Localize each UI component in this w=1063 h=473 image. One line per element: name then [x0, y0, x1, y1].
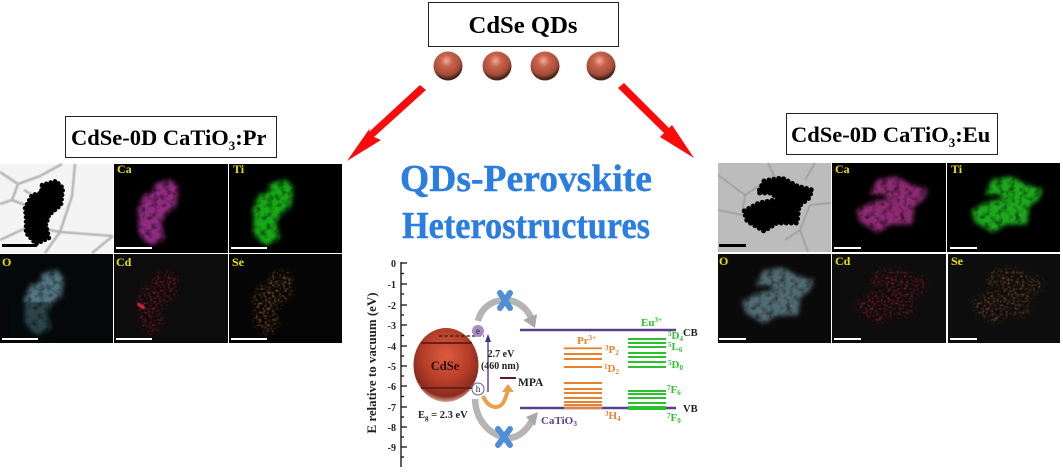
Pr Ti map	[229, 162, 342, 253]
Pr Ti map: Ti	[233, 162, 245, 176]
quantum dot spheres	[434, 52, 616, 80]
Eu O map: O	[719, 254, 728, 268]
heading: CdSe-0D CaTiO3:Eu	[786, 114, 998, 154]
Eu levels: 5	[668, 359, 672, 367]
Eu Ca map	[832, 162, 946, 252]
axis tick labels: -2	[388, 301, 396, 312]
axis tick labels: -9	[388, 443, 396, 454]
Pr levels: 3	[605, 344, 609, 352]
panel: Pr elemental maps	[0, 162, 342, 343]
box: CdSe QDs	[428, 2, 618, 46]
axis tick labels: -4	[388, 342, 396, 353]
Pr TEM image	[0, 164, 113, 253]
axis tick labels: -3	[388, 321, 396, 332]
Eu levels: L	[672, 341, 679, 353]
Pr Se map	[229, 254, 342, 343]
Eu levels: 7	[667, 384, 671, 392]
Pr levels: D	[608, 363, 616, 375]
axis tick labels: -6	[388, 382, 396, 393]
MPA level	[500, 377, 544, 389]
excitation label	[481, 349, 519, 372]
hole	[472, 383, 484, 395]
Pr Cd map	[114, 254, 228, 343]
arrow: to Eu panel	[618, 83, 694, 158]
electron: e	[476, 326, 480, 336]
Pr Ca map: Ca	[117, 162, 132, 176]
Eu levels: 0	[679, 364, 683, 372]
box: CdSe QDs: CdSe QDs	[468, 13, 578, 39]
axis tick labels: -8	[388, 423, 396, 434]
Eu levels: 5	[668, 330, 672, 338]
Pr levels: 2	[615, 368, 619, 376]
axis tick labels: -5	[388, 362, 396, 373]
Eu levels: 6	[679, 346, 683, 354]
Eu Ca map: Ca	[835, 162, 850, 176]
title: QDs-Perovskite	[400, 158, 652, 200]
Pr levels: Pr	[577, 335, 589, 347]
heading: CdSe-0D CaTiO3:Eu: 3	[949, 135, 956, 150]
Pr Cd map: Cd	[116, 255, 132, 269]
bandgap label: g	[425, 414, 429, 422]
Eu Se map	[948, 254, 1060, 343]
axis tick labels: 0	[391, 259, 396, 270]
Eu Se map: Se	[951, 254, 964, 268]
Pr levels: H	[608, 410, 618, 422]
heading: CdSe-0D CaTiO3:Pr: :Pr	[235, 125, 266, 150]
Eu levels: 7	[667, 412, 671, 420]
gray arrow heads	[523, 314, 538, 426]
excitation label: (460 nm)	[481, 361, 519, 372]
excitation label: 2.7 eV	[488, 349, 515, 360]
Eu levels: 5	[668, 341, 672, 349]
Pr Ca map	[114, 162, 228, 253]
bandgap label: E	[418, 410, 425, 421]
CB line: CB	[683, 328, 698, 339]
Pr Se map: Se	[232, 255, 245, 269]
CdSe core sphere: CdSe	[431, 359, 460, 373]
Pr levels: P	[608, 344, 616, 356]
Eu Cd map: Cd	[835, 254, 851, 268]
CaTiO3 label: CaTiO	[541, 415, 573, 427]
Eu levels: Eu	[641, 317, 654, 329]
energy level diagram	[364, 259, 698, 467]
Pr levels: 3+	[589, 334, 596, 342]
excitation arrow	[485, 334, 491, 392]
heading: CdSe-0D CaTiO3:Pr: 3	[229, 138, 236, 153]
Eu levels: D	[672, 330, 680, 342]
blocked marks	[498, 293, 510, 445]
Eu levels	[628, 316, 683, 425]
Eu Ti map	[947, 162, 1060, 252]
Pr O map	[0, 254, 113, 343]
heading: CdSe-0D CaTiO3:Pr: CdSe-0D CaTiO	[71, 125, 229, 150]
axis tick labels: -7	[388, 403, 396, 414]
Pr levels: 2	[615, 349, 619, 357]
gray transfer arrows	[475, 300, 533, 438]
Eu levels: 0	[677, 417, 681, 425]
Eu levels: F	[670, 384, 678, 396]
panel: Eu elemental maps	[718, 162, 1060, 343]
Eu levels: 4	[679, 335, 683, 343]
Pr levels	[564, 334, 621, 423]
Pr O map: O	[2, 255, 11, 269]
heading: CdSe-0D CaTiO3:Eu: :Eu	[955, 122, 990, 147]
Eu Cd map	[832, 254, 946, 343]
bandgap label: = 2.3 eV	[429, 410, 468, 421]
Eu levels: 3+	[654, 316, 662, 324]
Eu TEM image	[718, 163, 831, 252]
arrow: to Pr panel	[347, 85, 426, 161]
axis tick labels: -1	[388, 280, 396, 291]
CaTiO3 label: 3	[573, 419, 577, 428]
orange arrow	[483, 384, 514, 407]
title: Heterostructures	[402, 205, 650, 247]
Eu levels: D	[672, 359, 680, 371]
Pr levels: 1	[604, 363, 608, 371]
electron	[472, 325, 484, 337]
MPA level: MPA	[518, 377, 544, 389]
heading: CdSe-0D CaTiO3:Eu: CdSe-0D CaTiO	[791, 122, 949, 147]
Eu Ti map: Ti	[951, 162, 963, 176]
dashed level	[439, 335, 484, 337]
Eu O map	[718, 254, 831, 343]
title	[400, 158, 652, 247]
axis title: E relative to vacuum (eV)	[364, 292, 379, 434]
CdSe core sphere	[414, 328, 478, 402]
axis tick labels	[388, 259, 396, 454]
energy axis	[401, 262, 407, 467]
VB line: VB	[683, 404, 698, 415]
Pr levels: 3	[605, 410, 609, 418]
Eu levels: F	[670, 412, 678, 424]
hole: h	[476, 384, 481, 394]
heading: CdSe-0D CaTiO3:Pr	[66, 116, 276, 158]
Pr levels: 4	[617, 415, 621, 423]
Eu levels: 6	[677, 389, 681, 397]
